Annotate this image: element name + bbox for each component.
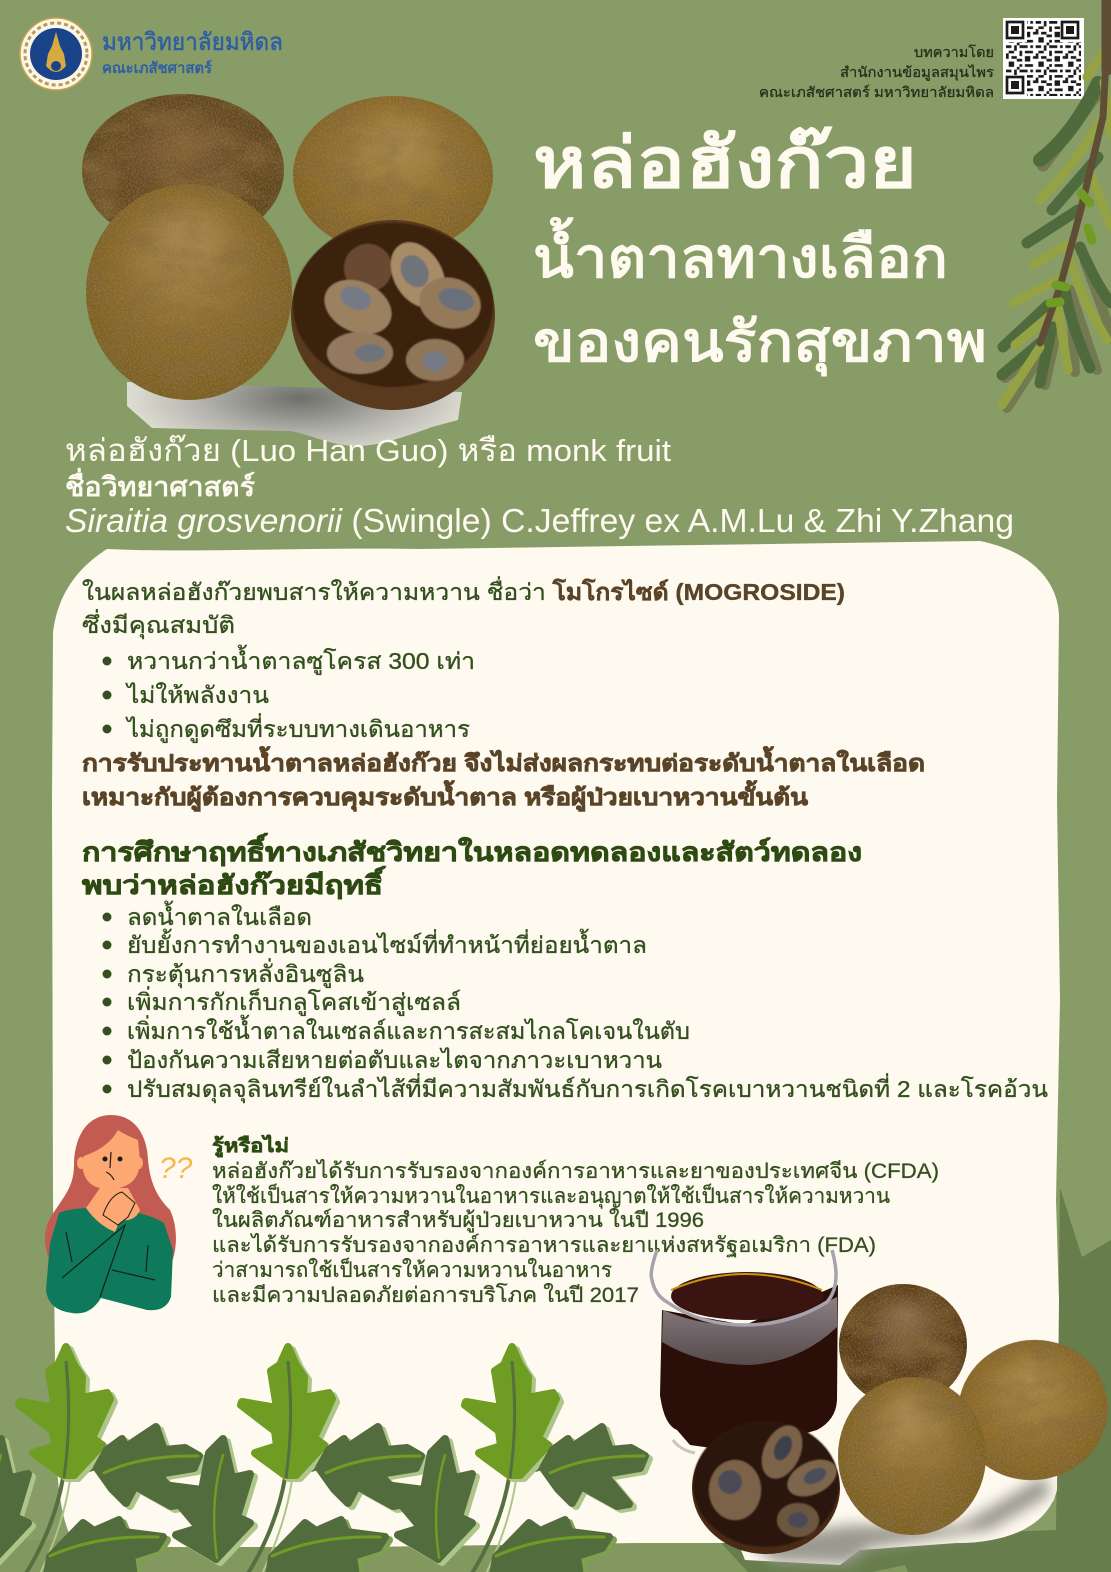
header: university logo: คณะเภสัชศาสตร์ — [102, 59, 213, 77]
article credit — [759, 44, 995, 100]
fruit right — [947, 1328, 1111, 1492]
pharmacology heading: พบว่าหล่อฮังก๊วยมีฤทธิ์ — [82, 865, 386, 900]
fruit front left — [86, 184, 292, 400]
title — [533, 124, 987, 376]
intro names text: ชื่อวิทยาศาสตร์ — [65, 467, 256, 502]
fruit back left — [82, 94, 284, 246]
question marks: ?? — [159, 1152, 193, 1185]
QR code — [1003, 18, 1084, 99]
leaf cluster 3 — [462, 1347, 649, 1572]
pharmacology bullet list — [102, 901, 1048, 1103]
did you know text: และได้รับการรับรองจากองค์การอาหารและยาแห่งสหรัฐอเมริกา (FDA) — [212, 1233, 876, 1257]
intro names text: Siraitia grosvenorii (Swingle) C.Jeffrey ex A.M.Lu & Zhi Y.Zhang — [65, 502, 1014, 539]
pharmacology bullet list: เพิ่มการกักเก็บกลูโคสเข้าสู่เซลล์ — [127, 986, 461, 1016]
photo: monk fruits top — [82, 94, 495, 446]
title: น้ำตาลทางเลือก — [533, 218, 948, 289]
photo shadow base — [127, 382, 462, 446]
did you know text: หล่อฮังก๊วยได้รับการรับรองจากองค์การอาหารและยาของประเทศจีน (CFDA) — [212, 1159, 939, 1183]
pharmacology bullet list: กระตุ้นการหลั่งอินซูลิน — [127, 958, 364, 988]
fruit back right — [293, 96, 493, 254]
mogroside text block: ในผลหล่อฮังก๊วยพบสารให้ความหวาน ชื่อว่า โมโกรไซด์ (MOGROSIDE) — [82, 576, 845, 605]
cut fruit — [291, 220, 495, 410]
cream content panel — [52, 541, 1060, 1547]
mogroside text block: ซึ่งมีคุณสมบัติ — [82, 609, 235, 639]
properties bullet list: ไม่ให้พลังงาน — [125, 682, 269, 708]
did you know text: ให้ใช้เป็นสารให้ความหวานในอาหารและอนุญาตให้ใช้เป็นสารให้ความหวาน — [212, 1182, 890, 1209]
properties bullet list — [102, 645, 475, 743]
decorative leaves bottom — [0, 1347, 649, 1572]
leaf cluster 1 — [16, 1347, 254, 1572]
pharmacology bullet list: ปรับสมดุลจุลินทรีย์ในลำไส้ที่มีความสัมพันธ์กับการเกิดโรคเบาหวานชนิดที่ 2 และโรคอ้วน — [127, 1073, 1048, 1103]
glass of drink — [651, 1250, 838, 1453]
mogroside text block: เหมาะกับผู้ต้องการควบคุมระดับน้ำตาล หรือผู้ป่วยเบาหวานขั้นต้น — [82, 780, 808, 812]
decorative branch top right — [1002, 0, 1111, 408]
header: university logo: มหาวิทยาลัยมหิดล — [102, 29, 283, 56]
article credit: คณะเภสัชศาสตร์ มหาวิทยาลัยมหิดล — [759, 84, 994, 100]
pharmacology bullet list: ลดน้ำตาลในเลือด — [127, 901, 312, 930]
title: หล่อฮังก๊วย — [533, 124, 917, 202]
properties bullet list: ไม่ถูกดูดซึมที่ระบบทางเดินอาหาร — [125, 713, 470, 743]
fruit front — [838, 1377, 986, 1535]
intro names text: หล่อฮังก๊วย (Luo Han Guo) หรือ monk fruit — [65, 433, 671, 468]
pharmacology heading — [82, 832, 862, 900]
pharmacology bullet list: เพิ่มการใช้น้ำตาลในเซลล์และการสะสมไกลโคเจนในตับ — [127, 1015, 690, 1044]
photo: monk fruit drink and fruits bottom right — [651, 1250, 1111, 1565]
properties bullet list: หวานกว่าน้ำตาลซูโครส 300 เท่า — [127, 645, 475, 675]
mogroside text block — [82, 576, 925, 812]
intro names text — [65, 433, 1014, 539]
mogroside text block: การรับประทานน้ำตาลหล่อฮังก๊วย จึงไม่ส่งผลกระทบต่อระดับน้ำตาลในเลือด — [82, 746, 925, 776]
leaf cluster 2 — [238, 1347, 476, 1572]
did you know text: รู้หรือไม่ — [212, 1134, 289, 1158]
header: university logo — [20, 18, 283, 90]
illustration: thinking woman — [45, 1115, 193, 1313]
did you know text: ในผลิตภัณฑ์อาหารสำหรับผู้ป่วยเบาหวาน ในปี 1996 — [212, 1208, 704, 1233]
pharmacology bullet list: ป้องกันความเสียหายต่อตับและไตจากภาวะเบาหวาน — [127, 1047, 662, 1073]
white photo patch and ground shadow — [735, 1470, 1057, 1565]
fruit top brown — [839, 1284, 967, 1406]
article credit: สำนักงานข้อมูลสมุนไพร — [840, 64, 995, 81]
pharmacology heading: การศึกษาฤทธิ์ทางเภสัชวิทยาในหลอดทดลองและสัตว์ทดลอง — [82, 832, 862, 867]
title: ของคนรักสุขภาพ — [533, 310, 987, 376]
leaf cluster 0 — [0, 1439, 32, 1562]
article credit: บทความโดย — [914, 44, 994, 60]
cut fruit — [692, 1419, 842, 1554]
did you know text: และมีความปลอดภัยต่อการบริโภค ในปี 2017 — [212, 1283, 639, 1307]
did you know text: ว่าสามารถใช้เป็นสารให้ความหวานในอาหาร — [212, 1256, 612, 1282]
did you know text — [212, 1134, 939, 1307]
pharmacology bullet list: ยับยั้งการทำงานของเอนไซม์ที่ทำหน้าที่ย่อยน้ำตาล — [127, 929, 647, 958]
